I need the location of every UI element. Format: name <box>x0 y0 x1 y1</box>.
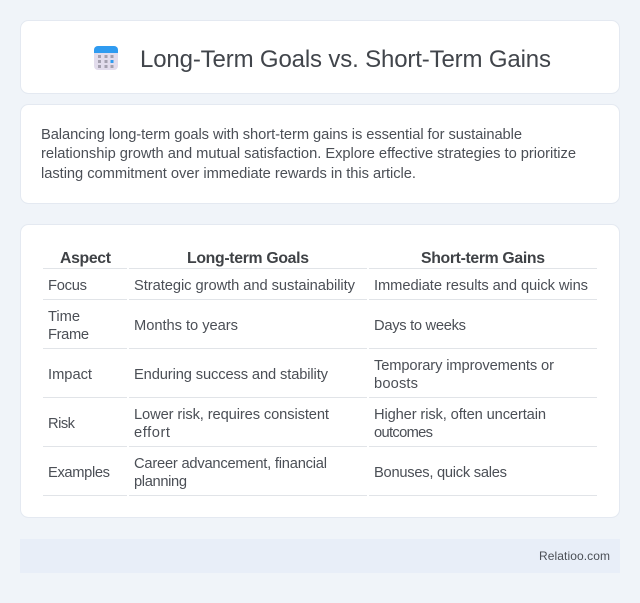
footer <box>20 539 620 573</box>
intro text <box>41 127 576 182</box>
panel: comparison table <box>20 224 620 518</box>
row: examples: Bonuses, quick sales <box>374 465 507 481</box>
intro text: relationship growth and mutual satisfaction. Explore effective strategies to prioritize <box>41 146 576 162</box>
table header: Long-term Goals <box>187 250 309 267</box>
panel: title card <box>20 20 620 94</box>
row: risk: Risk <box>48 416 76 432</box>
row: examples: Examples <box>48 465 110 481</box>
row: risk: Lower risk, requires consistent <box>134 407 329 423</box>
row: focus <box>48 278 588 294</box>
row: focus: Strategic growth and sustainability <box>134 278 356 294</box>
row: risk: effort <box>134 425 170 441</box>
row: risk: Higher risk, often uncertain <box>374 407 546 423</box>
row: examples: Career advancement, financial <box>134 456 327 472</box>
table header: Short-term Gains <box>421 250 545 267</box>
row: impact: Temporary improvements or <box>374 358 554 374</box>
panel: introduction <box>20 104 620 204</box>
row: examples <box>48 456 507 490</box>
row: focus: Focus <box>48 278 87 294</box>
row: time frame: Frame <box>48 327 89 343</box>
footer credit: Relatioo.com <box>539 549 610 563</box>
table header: Aspect <box>60 250 112 267</box>
row: time frame <box>48 309 466 343</box>
intro text: lasting commitment over immediate rewards in this article. <box>41 166 416 182</box>
row: time frame: Days to weeks <box>374 318 466 334</box>
title: Long-Term Goals vs. Short-Term Gains <box>140 46 551 73</box>
intro text: Balancing long-term goals with short-term gains is essential for sustainable <box>41 127 522 143</box>
row: impact: Enduring success and stability <box>134 367 329 383</box>
table header <box>60 250 545 267</box>
row: impact: boosts <box>374 376 418 392</box>
row: time frame: Months to years <box>134 318 238 334</box>
row: risk: outcomes <box>374 425 433 441</box>
row: impact <box>48 358 554 392</box>
row: examples: planning <box>134 474 187 490</box>
row: impact: Impact <box>48 367 92 383</box>
icon: calendar <box>94 46 118 70</box>
row: time frame: Time <box>48 309 80 325</box>
row: risk <box>48 407 546 441</box>
row: focus: Immediate results and quick wins <box>374 278 588 294</box>
